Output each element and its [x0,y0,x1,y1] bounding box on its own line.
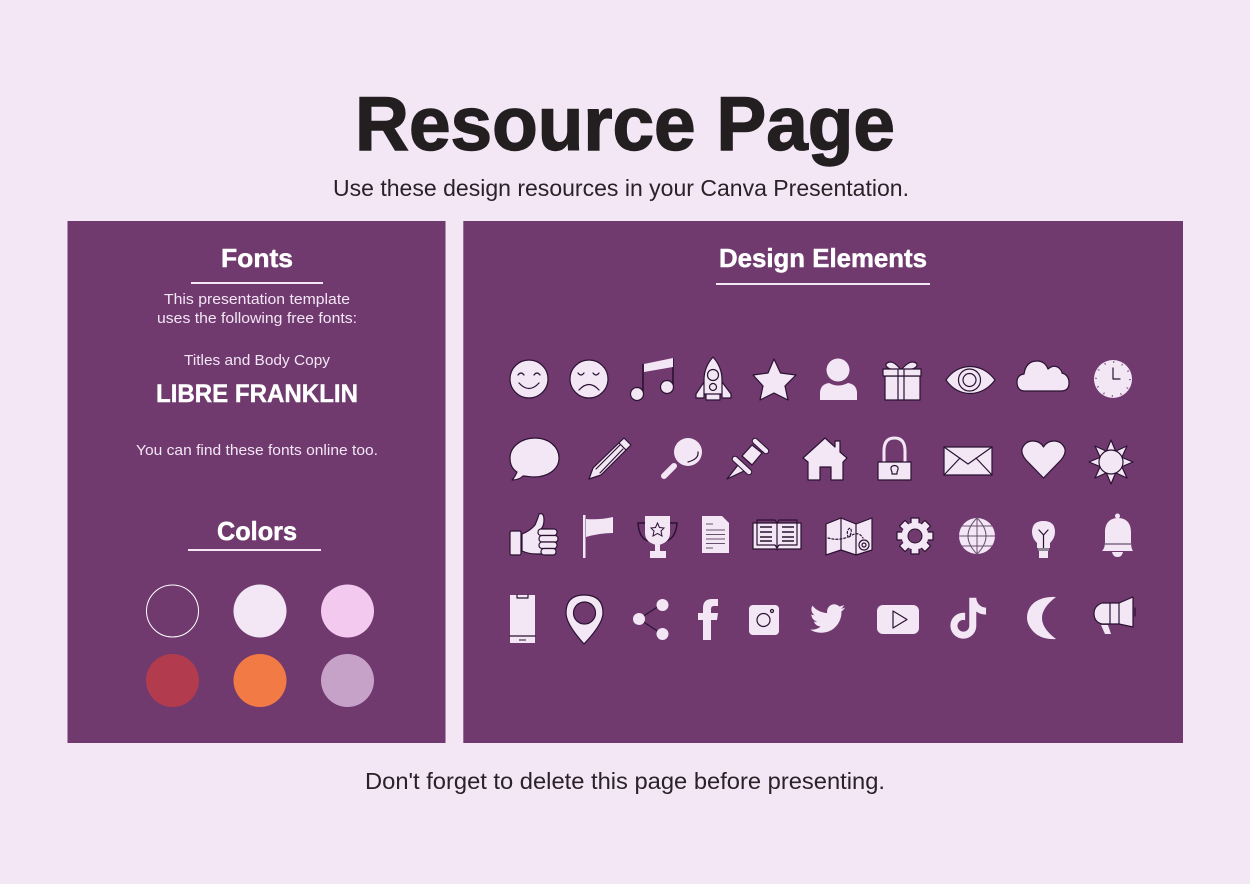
icon: smile [510,360,548,398]
icon: music note [630,358,674,400]
heading: design elements: Design Elements [719,243,927,273]
icon: tiktok [950,598,986,639]
subtitle: Use these design resources in your Canva Presentation. [333,175,909,201]
icon: cloud [1017,361,1069,391]
icon: megaphone [1094,597,1135,634]
icon: flag [583,515,613,558]
color swatches [146,584,374,707]
heading: colors: Colors [217,516,297,546]
icon: push pin [727,441,766,479]
icon: smartphone [510,595,535,643]
icon: globe [959,518,995,554]
icon: instagram [749,605,779,635]
icon: pencil [589,438,631,479]
icon: envelope [944,447,992,475]
text: font name: LIBRE FRANKLIN [156,380,358,408]
icon: open book [753,520,801,550]
text: fonts intro [157,291,357,327]
text: fonts intro: uses the following free fonts: [157,310,357,327]
icon: gear [897,518,933,554]
icon: clock [1094,360,1132,398]
icon: sad face [570,360,608,398]
icon: padlock [878,438,911,480]
icon: house [803,438,847,480]
icon: star [753,359,796,400]
panel: design elements [463,221,1183,743]
icon: person [820,358,857,400]
icon: facebook [698,599,718,640]
heading: colors [188,516,321,551]
icon: trophy [638,516,677,558]
icon: gift [883,362,921,400]
icon: document [702,516,729,553]
text: fonts online note: You can find these fonts online too. [136,442,378,459]
icon: youtube [877,605,919,634]
heading: fonts [191,243,323,284]
icon: bell [1102,514,1133,557]
icon: twitter [810,604,845,633]
icon: speech bubble [510,438,559,480]
icon: sun [1089,440,1133,484]
text: titles and body copy label: Titles and Body Copy [184,352,330,369]
icon: folded map [826,518,872,555]
icon: light bulb [1032,521,1055,558]
icon: map pin [566,595,603,644]
icon: rocket [696,357,731,400]
icon: eye [946,366,995,394]
heading: fonts: Fonts [221,243,293,273]
icon: magnifier [664,438,702,476]
text: fonts intro: This presentation template [164,291,350,308]
panel: fonts and colors [68,221,446,743]
icon: thumbs up [510,514,558,555]
icon: crescent moon [1027,597,1056,639]
icon: heart [1022,441,1065,478]
icon: share [633,599,668,640]
title: Resource Page [355,82,895,167]
footer note: Don't forget to delete this page before presenting. [365,768,885,794]
